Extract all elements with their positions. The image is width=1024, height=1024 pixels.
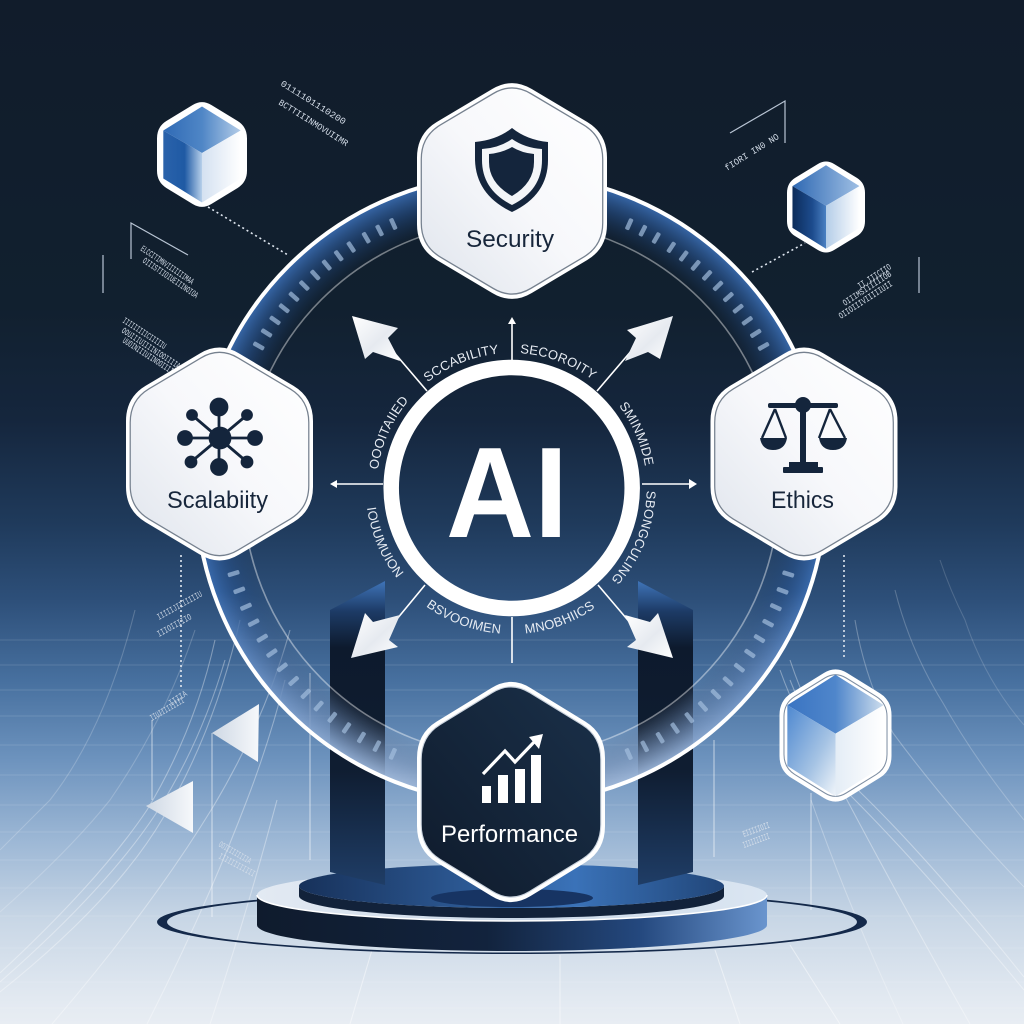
hex card — [417, 83, 607, 299]
micro text: lower left blocks: IIIOIIIIIO — [156, 612, 194, 640]
AI heading: AI — [446, 421, 568, 565]
left arrowhead — [330, 480, 337, 488]
panel: Performance — [417, 682, 605, 902]
icon: balance scales — [760, 397, 847, 473]
micro text: lower right block: EIIIIIOII — [742, 821, 771, 840]
label left upper: OOOITAIIED — [370, 397, 407, 468]
triangle marker upper — [212, 704, 259, 762]
label: Security: Security — [466, 226, 554, 253]
arrow: lower right — [625, 613, 673, 658]
hex card — [417, 682, 605, 902]
radial arrows around center — [330, 316, 697, 663]
label left lower: IOUUMUION — [367, 508, 404, 578]
micro text: left block two: OOUIIIUIIIINIOOIIIIA — [119, 326, 182, 372]
platform: upper disc — [299, 864, 724, 918]
micro text: left block two: IIIIIIIIICIIIIIU — [120, 316, 168, 352]
arrow: upper left — [352, 316, 400, 361]
platform: lower disc — [257, 869, 767, 951]
micro text: lower right block — [742, 821, 771, 851]
label bottom left: BSVOOIMEN — [426, 600, 500, 634]
micro text: lower right block: IIIIIIIIII — [742, 832, 771, 851]
micro text: left block one: OIIISTIIOIUEIIINOIOA — [140, 256, 200, 301]
small thin connector lines on the lower sides — [152, 673, 811, 917]
ring band — [220, 198, 802, 780]
micro text: lower left blocks: OOIIIIIIIIIA — [216, 840, 253, 867]
label right lower: SBONGCULING — [612, 491, 656, 584]
micro text: left block one — [138, 244, 200, 301]
micro text: right block: II.IIICIIO — [856, 262, 894, 292]
arrow: upper right — [625, 316, 673, 361]
label: Performance: Performance — [441, 821, 578, 848]
dotted connector lines — [181, 207, 844, 687]
icon: rising chart — [482, 734, 543, 803]
micro text: lower left blocks — [148, 590, 257, 879]
panel: Security — [417, 83, 607, 299]
micro text: top left binary: BCTTIIINMOVUIIMR — [276, 98, 350, 149]
micro text: left block two: UUOINIIIUIINOOIIIIN — [120, 336, 178, 378]
label: Ethics: Ethics — [771, 487, 834, 514]
label: Scalability: Scalabiity — [167, 487, 268, 514]
floor grid and flowing lines — [0, 560, 1024, 1024]
cube: bottom right — [780, 669, 892, 802]
hex card — [126, 348, 313, 560]
ring band lower light fade — [222, 608, 800, 788]
label right upper: SMINMIDE — [620, 402, 654, 466]
right arrowhead — [689, 479, 697, 489]
ring ticks — [227, 218, 795, 760]
label upper left: SCCABILITY — [424, 344, 498, 381]
icon: network — [178, 399, 262, 474]
orbit ring on the floor — [157, 890, 867, 954]
arrow: lower left — [351, 613, 400, 658]
right pillar — [638, 581, 693, 885]
panel: Scalability — [126, 348, 313, 560]
central AI badge — [391, 368, 632, 608]
label upper right: SECOROITY — [520, 344, 598, 378]
arrow lines — [334, 320, 693, 663]
micro text: right block: OIIIMSIIIIIIOB — [841, 269, 894, 309]
micro text: lower left blocks: IIUIIIIIIIII — [148, 696, 186, 724]
label bottom right: MNOBHIICS — [525, 602, 594, 634]
center ring — [391, 368, 632, 608]
hex card — [710, 348, 898, 560]
micro text: right block: OIIOIIIVIIIIIUII — [837, 279, 895, 322]
corner brackets and small vertical bars — [103, 101, 919, 293]
ring outer line — [196, 174, 826, 804]
micro text: lower left blocks: IIIIA — [167, 689, 190, 709]
icon: shield — [475, 128, 548, 212]
main circular ring — [196, 174, 826, 804]
ring inner line — [243, 221, 779, 757]
cube: top left — [157, 102, 247, 207]
micro text: top left binary: 0111101110200 — [278, 79, 347, 127]
top arrowhead — [508, 317, 516, 324]
cube: top right — [787, 161, 865, 253]
micro text: top left binary — [276, 79, 350, 149]
micro text: left block one: ELCCITIMNVIIIIIIIMAA — [138, 244, 196, 287]
triangle marker lower — [146, 781, 193, 833]
micro text: top right label: fIORI IN0 NO — [723, 132, 781, 174]
panel: Ethics — [710, 348, 898, 560]
micro text: lower left blocks: IIIIIIIIIIII — [217, 852, 257, 879]
curved micro labels around center — [367, 344, 656, 634]
micro text: lower left blocks: IIIIIJIIIIIIIU — [156, 590, 204, 623]
left pillar — [330, 581, 385, 885]
